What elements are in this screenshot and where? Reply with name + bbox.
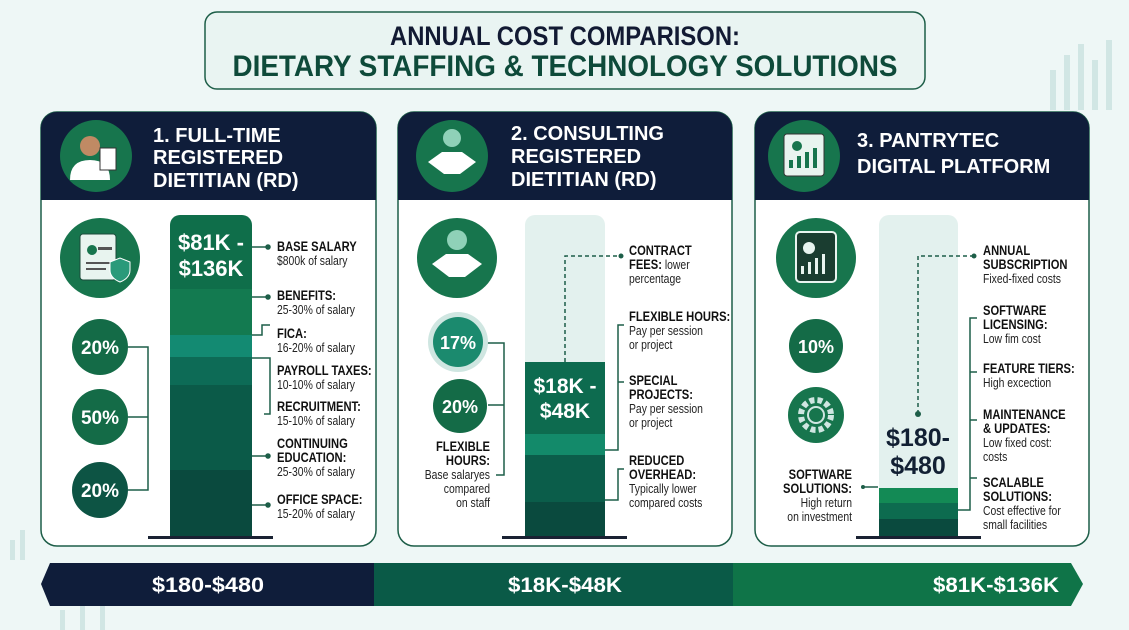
cost labels: full-time: BENEFITS: bbox=[277, 288, 336, 303]
icon: tablet bbox=[776, 218, 856, 298]
bar chart: consulting bbox=[502, 215, 627, 539]
cost labels: consulting: percentage bbox=[629, 272, 681, 286]
bar chart: consulting: $48K bbox=[540, 400, 590, 423]
cost labels: consulting: PROJECTS: bbox=[629, 387, 693, 402]
bottom cost bar: $180-$480 bbox=[152, 574, 264, 597]
cost labels: pantrytec: FEATURE TIERS: bbox=[983, 361, 1075, 376]
cost labels: pantrytec: small facilities bbox=[983, 518, 1047, 532]
cost labels: full-time: RECRUITMENT: bbox=[277, 399, 361, 414]
cost labels: pantrytec: SOFTWARE bbox=[983, 303, 1046, 318]
cost labels: pantrytec: & UPDATES: bbox=[983, 421, 1051, 436]
cost labels: consulting: OVERHEAD: bbox=[629, 467, 696, 482]
percentages: 17% bbox=[440, 333, 476, 353]
heading: 3. PANTRYTEC bbox=[857, 130, 999, 152]
cost labels: full-time: EDUCATION: bbox=[277, 450, 346, 465]
software solutions note: SOLUTIONS: bbox=[783, 481, 852, 496]
bar chart: pantrytec: $480 bbox=[890, 452, 946, 480]
cost labels: consulting: CONTRACT bbox=[629, 243, 692, 258]
heading: REGISTERED bbox=[511, 146, 641, 168]
cost labels: full-time: 16-20% of salary bbox=[277, 341, 355, 355]
cost labels: consulting: REDUCED bbox=[629, 453, 684, 468]
percentage bbox=[789, 319, 843, 373]
bottom cost bar: $18K-$48K bbox=[508, 574, 622, 597]
cost labels: pantrytec: SCALABLE bbox=[983, 475, 1044, 490]
icon: handshake bbox=[417, 218, 497, 298]
bar chart: pantrytec bbox=[856, 215, 981, 539]
panel: full-time RD bbox=[41, 112, 376, 546]
icon: handshake header bbox=[416, 120, 488, 192]
cost labels: full-time: $800k of salary bbox=[277, 254, 348, 268]
cost labels: consulting: Typically lower bbox=[629, 482, 697, 496]
software solutions note: SOFTWARE bbox=[789, 467, 852, 482]
percentages: 50% bbox=[81, 408, 119, 429]
cost labels: consulting: Pay per session bbox=[629, 324, 703, 338]
title: ANNUAL COST COMPARISON: bbox=[390, 21, 740, 51]
percentages bbox=[72, 319, 148, 518]
heading: DIETITIAN (RD) bbox=[511, 169, 657, 191]
bottom cost bar: $81K-$136K bbox=[933, 574, 1059, 597]
cost labels: pantrytec: SOLUTIONS: bbox=[983, 489, 1052, 504]
cost labels: full-time: 15-20% of salary bbox=[277, 507, 355, 521]
cost labels: consulting: FEES: lower bbox=[629, 257, 690, 272]
cost labels: full-time: PAYROLL TAXES: bbox=[277, 363, 372, 378]
cost labels: pantrytec: ANNUAL bbox=[983, 243, 1030, 258]
title: DIETARY STAFFING & TECHNOLOGY SOLUTIONS bbox=[232, 50, 898, 83]
cost labels: pantrytec: MAINTENANCE bbox=[983, 407, 1066, 422]
percentages: compared bbox=[444, 482, 490, 496]
cost labels: pantrytec: Low fim cost bbox=[983, 332, 1041, 346]
heading: DIETITIAN (RD) bbox=[153, 170, 299, 192]
panel: consulting RD bbox=[398, 112, 732, 546]
cost labels: pantrytec bbox=[958, 243, 1075, 532]
cost labels: consulting: FLEXIBLE HOURS: bbox=[629, 309, 730, 324]
heading: REGISTERED bbox=[153, 147, 283, 169]
cost labels: pantrytec: costs bbox=[983, 450, 1007, 464]
icon: dietitian bbox=[60, 120, 132, 192]
heading: DIGITAL PLATFORM bbox=[857, 156, 1050, 178]
title bbox=[205, 12, 925, 89]
cost labels: pantrytec: LICENSING: bbox=[983, 317, 1048, 332]
cost labels: full-time: CONTINUING bbox=[277, 436, 348, 451]
icon: gear bbox=[788, 387, 844, 443]
percentages: 20% bbox=[442, 397, 478, 417]
cost labels: full-time: BASE SALARY bbox=[277, 239, 357, 254]
bar chart: full-time: $136K bbox=[179, 256, 244, 281]
cost labels: full-time: 10-10% of salary bbox=[277, 378, 355, 392]
heading: 1. FULL-TIME bbox=[153, 125, 281, 147]
cost labels: full-time: 25-30% of salary bbox=[277, 303, 355, 317]
cost labels: consulting bbox=[605, 243, 730, 510]
cost labels: full-time: 25-30% of salary bbox=[277, 465, 355, 479]
software solutions note: High return bbox=[801, 496, 852, 510]
bar chart: full-time bbox=[148, 215, 273, 539]
percentages: HOURS: bbox=[446, 453, 490, 468]
cost labels: consulting: or project bbox=[629, 338, 673, 352]
cost labels: pantrytec: Fixed-fixed costs bbox=[983, 272, 1061, 286]
cost labels: full-time: 15-10% of salary bbox=[277, 414, 355, 428]
bar chart: pantrytec: $180- bbox=[886, 424, 950, 452]
software solutions note: on investment bbox=[787, 510, 853, 524]
software solutions note bbox=[783, 467, 878, 524]
cost labels: full-time: FICA: bbox=[277, 326, 307, 341]
cost labels: full-time bbox=[252, 239, 372, 521]
icon: tablet header bbox=[768, 120, 840, 192]
cost labels: consulting: Pay per session bbox=[629, 402, 703, 416]
percentages: FLEXIBLE bbox=[436, 439, 490, 454]
cost labels: pantrytec: High excection bbox=[983, 376, 1051, 390]
cost labels: full-time: OFFICE SPACE: bbox=[277, 492, 363, 507]
percentages: Base salaryes bbox=[425, 468, 490, 482]
percentages: 20% bbox=[81, 481, 119, 502]
heading bbox=[153, 125, 299, 192]
bar chart: full-time: $81K - bbox=[178, 230, 244, 255]
panel: PantryTec bbox=[755, 112, 1089, 546]
heading: 2. CONSULTING bbox=[511, 123, 664, 145]
cost labels: consulting: SPECIAL bbox=[629, 373, 678, 388]
cost labels: pantrytec: SUBSCRIPTION bbox=[983, 257, 1067, 272]
cost labels: pantrytec: Low fixed cost: bbox=[983, 436, 1052, 450]
bottom cost bar bbox=[41, 563, 1083, 606]
heading bbox=[511, 123, 664, 191]
percentages: 20% bbox=[81, 338, 119, 359]
percentage: 10% bbox=[798, 337, 834, 357]
heading bbox=[857, 130, 1050, 178]
cost labels: consulting: or project bbox=[629, 416, 673, 430]
percentages: on staff bbox=[456, 496, 491, 510]
bar chart: consulting: $18K - bbox=[533, 375, 597, 398]
icon: clipboard bbox=[60, 218, 140, 298]
cost labels: pantrytec: Cost effective for bbox=[983, 504, 1061, 518]
percentages bbox=[425, 312, 504, 510]
cost labels: consulting: compared costs bbox=[629, 496, 702, 510]
